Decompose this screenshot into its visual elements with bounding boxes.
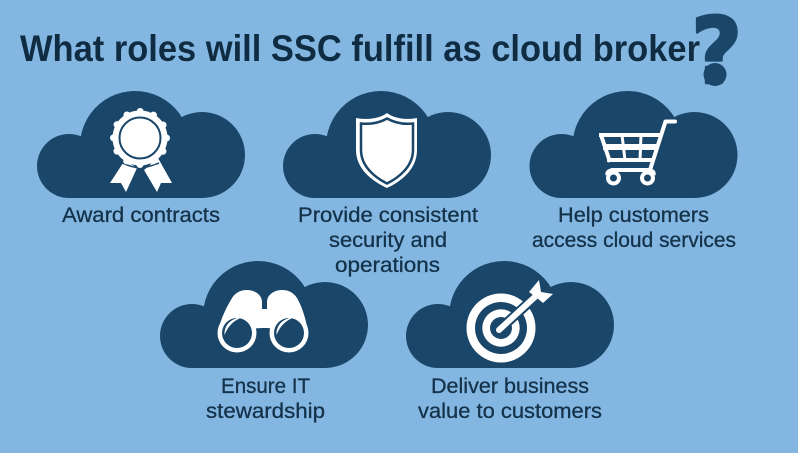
cloud — [160, 261, 368, 368]
panel: IT stewardship — [160, 261, 368, 423]
label: access cloud services — [532, 229, 736, 252]
label: security and — [329, 229, 447, 252]
title: What roles will SSC fulfill as cloud broker — [20, 28, 700, 69]
label: Ensure IT — [221, 375, 310, 398]
icon: shield — [356, 113, 417, 188]
icon: target with arrow — [466, 280, 553, 362]
label — [206, 375, 325, 423]
panel: business value — [406, 261, 614, 423]
icon: award rosette — [110, 110, 172, 192]
label: Award contracts — [62, 204, 220, 227]
label — [418, 375, 602, 423]
label: value to customers — [418, 400, 602, 423]
cloud — [406, 261, 614, 368]
panel: cloud services access — [530, 91, 738, 252]
label: operations — [335, 254, 440, 277]
icon: shopping cart — [599, 122, 675, 184]
label — [532, 204, 736, 252]
icon: binoculars — [218, 290, 308, 352]
cloud — [37, 91, 245, 198]
label — [298, 204, 478, 277]
question mark: ? — [691, 0, 742, 105]
cloud — [283, 91, 491, 198]
label: Provide consistent — [298, 204, 478, 227]
label: stewardship — [206, 400, 325, 423]
label: Help customers — [558, 204, 709, 227]
panel: award contracts — [37, 91, 245, 227]
panel: security and operations — [283, 91, 491, 277]
cloud — [530, 91, 738, 198]
label: Deliver business — [431, 375, 589, 398]
